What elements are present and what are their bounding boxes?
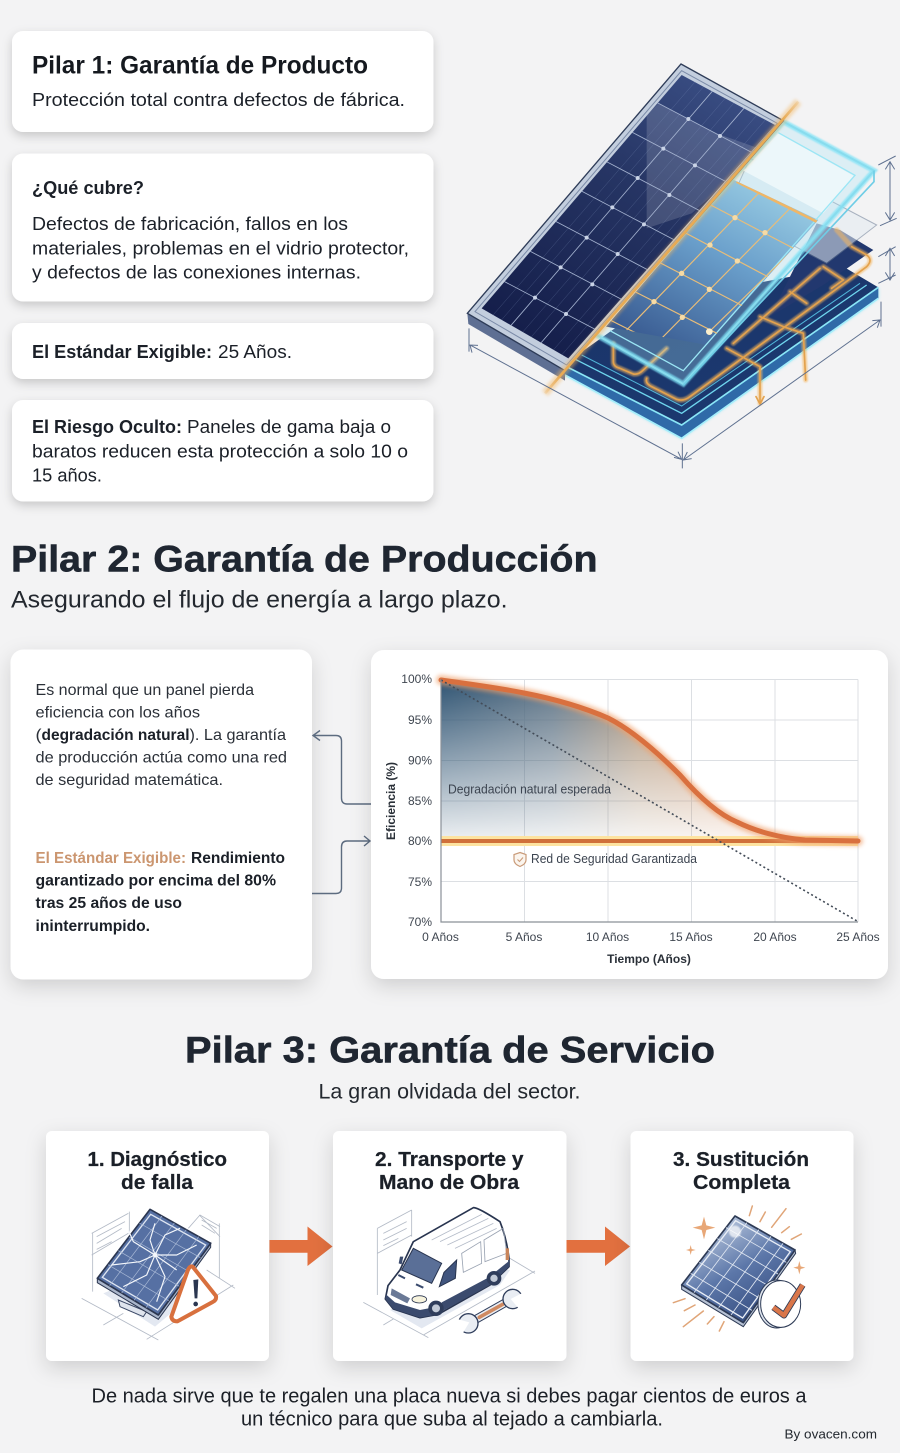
- panel: riesgo oculto card: 15 años.: [32, 464, 102, 486]
- panel: explanation text: Es normal que un panel pierda: [36, 682, 254, 699]
- panel: que cubre card: [12, 154, 434, 302]
- heading: pilar 2: [11, 538, 598, 614]
- chart grid: [441, 680, 858, 922]
- y axis labels: 95%: [408, 713, 432, 727]
- text: credit: By ovacen.com: [784, 1428, 877, 1442]
- arrow: chart to text connector: [313, 730, 371, 804]
- panel: que cubre card: Defectos de fabricación, fallos en los: [32, 213, 348, 234]
- panel: que cubre card: y defectos de las conexiones internas.: [32, 262, 361, 282]
- y axis labels: 75%: [408, 875, 432, 889]
- panel: step 3 replacement: [630, 1131, 854, 1361]
- panel: riesgo oculto card: Paneles de gama baja o: [187, 416, 391, 437]
- panel: explanation text: eficiencia con los años: [36, 704, 200, 722]
- panel: pilar 1 title card: Pilar 1: Garantía de Producto: [32, 52, 368, 80]
- panel: estandar exigible card: [12, 323, 434, 379]
- degradation curve: [441, 680, 858, 841]
- x axis labels: [422, 930, 880, 944]
- orange cell grid: [611, 181, 818, 338]
- heading: pilar 3: La gran olvidada del sector.: [318, 1080, 580, 1104]
- heading: pilar 2: Pilar 2: Garantía de Producción: [11, 538, 598, 580]
- x axis labels: 10 Años: [586, 930, 629, 944]
- chart annotation: natural degradation: Degradación natural esperada: [448, 782, 611, 796]
- panel: step 1 diagnostic: [46, 1131, 269, 1361]
- dimension arrows: [469, 156, 897, 468]
- x axis labels: 0 Años: [422, 930, 459, 944]
- axis titles: Eficiencia (%): [384, 762, 398, 840]
- text: closing statement: un técnico para que suba al tejado a cambiarla.: [241, 1408, 663, 1430]
- panel: riesgo oculto card: El Riesgo Oculto:: [32, 417, 182, 437]
- arrow: step 1 to step 2: [270, 1226, 332, 1266]
- orange circuit traces: [613, 230, 870, 404]
- icon: new panel with check: [673, 1206, 805, 1331]
- bottom plate: [563, 267, 878, 438]
- text: closing statement: [92, 1386, 807, 1430]
- front dark panel: [467, 64, 783, 381]
- cell nodes: [651, 215, 768, 335]
- axis titles: [384, 762, 691, 966]
- y axis labels: [401, 672, 432, 929]
- y axis labels: 80%: [408, 834, 432, 848]
- y axis labels: 100%: [401, 672, 432, 686]
- panel: explanation text: degradación natural: [42, 727, 190, 744]
- panel: step 3 replacement: Completa: [693, 1171, 791, 1194]
- panel: step 2 transport: Mano de Obra: [379, 1171, 520, 1194]
- text: closing statement: De nada sirve que te regalen una placa nueva si debes pagar cientos de euros a: [92, 1386, 807, 1408]
- arrow: step 2 to step 3: [566, 1226, 630, 1266]
- area under curve: [442, 682, 764, 836]
- heading: pilar 3: Pilar 3: Garantía de Servicio: [185, 1030, 715, 1070]
- panel: step 1 diagnostic: 1. Diagnóstico: [88, 1148, 227, 1171]
- panel: step 2 transport: 2. Transporte y: [375, 1148, 524, 1171]
- panel: step 2 transport: [333, 1131, 566, 1361]
- panel: efficiency chart: [371, 650, 888, 979]
- panel: pilar 1 title card: Protección total contra defectos de fábrica.: [32, 89, 405, 110]
- panel: step 3 replacement: 3. Sustitución: [673, 1148, 809, 1171]
- heading: pilar 2: Asegurando el flujo de energía a largo plazo.: [11, 586, 508, 614]
- panel: explanation text: de producción actúa como una red: [36, 750, 287, 766]
- panel: explanation text: El Estándar Exigible:: [36, 850, 186, 867]
- panel: explanation text: (: [36, 727, 42, 744]
- y axis labels: 70%: [408, 915, 432, 929]
- glass frame with cells: [593, 122, 874, 385]
- x axis labels: 15 Años: [669, 930, 713, 944]
- axis titles: Tiempo (Años): [607, 952, 691, 966]
- panel: explanation text: de seguridad matemática.: [36, 772, 223, 789]
- middle layer sheet: [727, 158, 877, 317]
- icon: cracked panel with warning: [82, 1209, 235, 1340]
- heading: pilar 3: [185, 1030, 715, 1104]
- panel: explanation text: ). La garantía: [190, 727, 286, 744]
- illustration: exploded solar panel: [467, 64, 897, 468]
- panel: pilar 1 title card: [12, 31, 434, 132]
- guaranteed safety line: [441, 830, 858, 852]
- orange cut line: [545, 102, 798, 393]
- panel: explanation text: ininterrumpido.: [36, 918, 150, 935]
- y axis labels: 90%: [408, 754, 432, 768]
- dotted linear line: [441, 680, 857, 921]
- panel: explanation text: tras 25 años de uso: [36, 895, 182, 912]
- panel: explanation text: [10, 650, 312, 980]
- panel: riesgo oculto card: baratos reducen esta protección a solo 10 o: [32, 440, 408, 462]
- x axis labels: 20 Años: [753, 930, 797, 944]
- y axis labels: 85%: [408, 794, 432, 808]
- panel: explanation text: Rendimiento: [191, 850, 285, 867]
- panel: explanation text: garantizado por encima del 80%: [36, 872, 276, 890]
- panel: que cubre card: materiales, problemas en el vidrio protector,: [32, 238, 409, 258]
- arrow: text to chart connector: [312, 836, 370, 894]
- panel: riesgo oculto card: [12, 400, 434, 502]
- x axis labels: 5 Años: [506, 930, 542, 944]
- panel: estandar exigible card: El Estándar Exigible:: [32, 342, 212, 362]
- panel: step 1 diagnostic: de falla: [121, 1171, 194, 1194]
- chart annotation: safety net: Red de Seguridad Garantizada: [531, 852, 697, 866]
- x axis labels: 25 Años: [836, 930, 880, 944]
- icon: service van and wrench: [363, 1208, 535, 1338]
- panel: que cubre card: ¿Qué cubre?: [32, 178, 144, 198]
- chart axes: [441, 680, 858, 922]
- panel: estandar exigible card: 25 Años.: [218, 341, 292, 362]
